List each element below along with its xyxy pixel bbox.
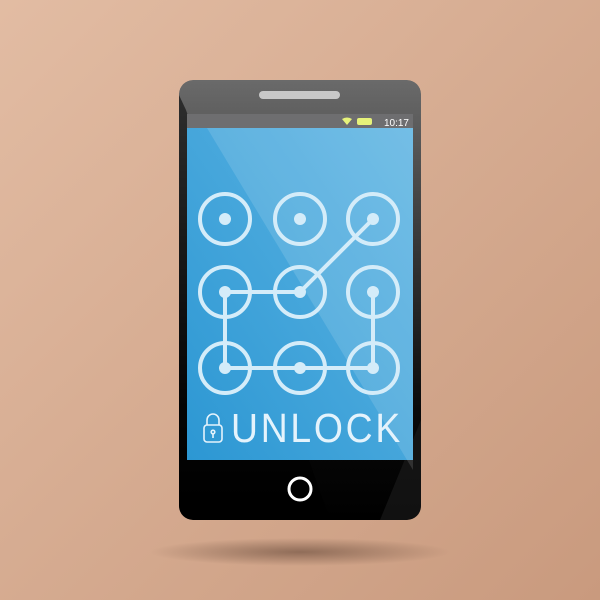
status bar <box>187 114 413 129</box>
speaker <box>259 91 340 99</box>
icon: lock <box>204 414 222 442</box>
UNLOCK text: UNLOCK <box>231 405 403 451</box>
unlock pattern <box>200 194 398 393</box>
status bar: 10:17 <box>384 118 409 129</box>
phone body <box>179 80 421 520</box>
shadow <box>150 538 450 566</box>
home button <box>289 478 311 500</box>
screen <box>187 128 413 470</box>
